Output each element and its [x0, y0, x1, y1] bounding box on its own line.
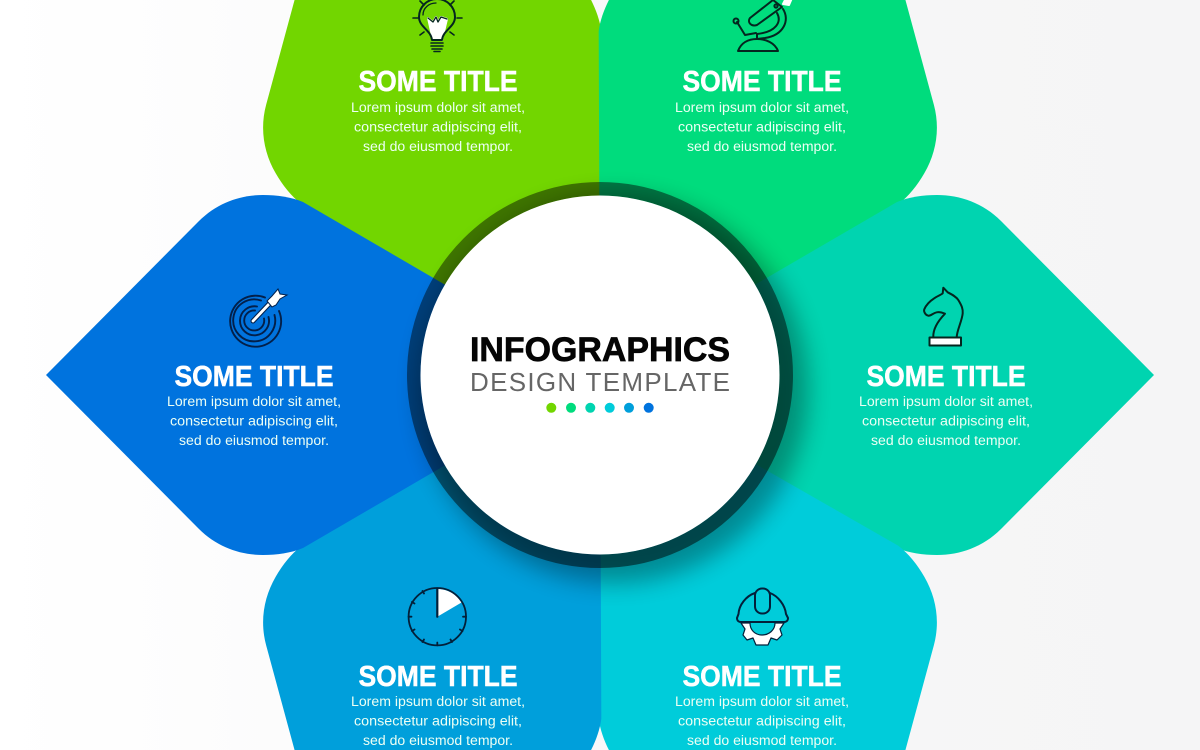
petal: green top right	[444, 0, 1033, 465]
text: title and copy right: sed do eiusmod tempor.	[871, 433, 1021, 448]
text: title and copy right: SOME TITLE	[866, 361, 1026, 393]
text: title and copy right: consectetur adipiscing elit,	[862, 414, 1030, 428]
icon: microscope	[734, 0, 792, 51]
text: title and copy left: Lorem ipsum dolor sit amet,	[167, 394, 341, 409]
text: title and copy top right: Lorem ipsum dolor sit amet,	[675, 100, 849, 115]
circle drop shadow	[420, 195, 808, 583]
icon: clock	[409, 588, 466, 645]
text: title and copy top left	[351, 66, 525, 154]
text: title and copy top right: consectetur adipiscing elit,	[678, 120, 846, 134]
petal: blue left	[46, 195, 600, 555]
icon: helmet and gear	[737, 588, 788, 645]
text: title and copy top right	[675, 66, 849, 154]
text: title and copy bottom left: consectetur adipiscing elit,	[354, 714, 522, 728]
text: title and copy bottom left: sed do eiusmod tempor.	[363, 733, 513, 748]
petal: lime top left	[167, 0, 756, 465]
colour dots	[546, 403, 654, 413]
text: title and copy left: sed do eiusmod tempor.	[179, 433, 329, 448]
text: title and copy top right: SOME TITLE	[682, 66, 842, 98]
text: title and copy top left: SOME TITLE	[358, 66, 518, 98]
white centre circle	[420, 196, 780, 554]
text: title and copy left: consectetur adipiscing elit,	[170, 414, 338, 428]
text: title and copy top right: sed do eiusmod tempor.	[687, 139, 837, 154]
text: title and copy right	[859, 361, 1033, 448]
petal: cyan bottom right	[444, 285, 1033, 750]
text: title and copy bottom right: consectetur adipiscing elit,	[678, 714, 846, 728]
centre title	[470, 331, 730, 397]
text: title and copy right: Lorem ipsum dolor sit amet,	[859, 394, 1033, 409]
text: title and copy bottom right	[675, 661, 849, 748]
icon: light bulb	[413, 0, 462, 52]
centre title: DESIGN TEMPLATE	[470, 367, 730, 397]
text: title and copy left	[167, 361, 341, 448]
text: title and copy bottom right: sed do eiusmod tempor.	[687, 733, 837, 748]
petal: teal right	[600, 195, 1154, 555]
petal: sky blue bottom left	[167, 285, 756, 750]
centre title: INFOGRAPHICS	[470, 331, 730, 369]
text: title and copy top left: sed do eiusmod tempor.	[363, 139, 513, 154]
icon: target with arrow	[230, 289, 287, 347]
text: title and copy bottom left	[351, 661, 525, 748]
text: title and copy bottom right: Lorem ipsum dolor sit amet,	[675, 694, 849, 709]
icon: chess knight	[924, 288, 963, 346]
dark ring	[414, 189, 786, 561]
text: title and copy top left: Lorem ipsum dolor sit amet,	[351, 100, 525, 115]
text: title and copy bottom right: SOME TITLE	[682, 661, 842, 693]
text: title and copy top left: consectetur adipiscing elit,	[354, 120, 522, 134]
text: title and copy left: SOME TITLE	[174, 361, 334, 393]
text: title and copy bottom left: Lorem ipsum dolor sit amet,	[351, 694, 525, 709]
text: title and copy bottom left: SOME TITLE	[358, 661, 518, 693]
